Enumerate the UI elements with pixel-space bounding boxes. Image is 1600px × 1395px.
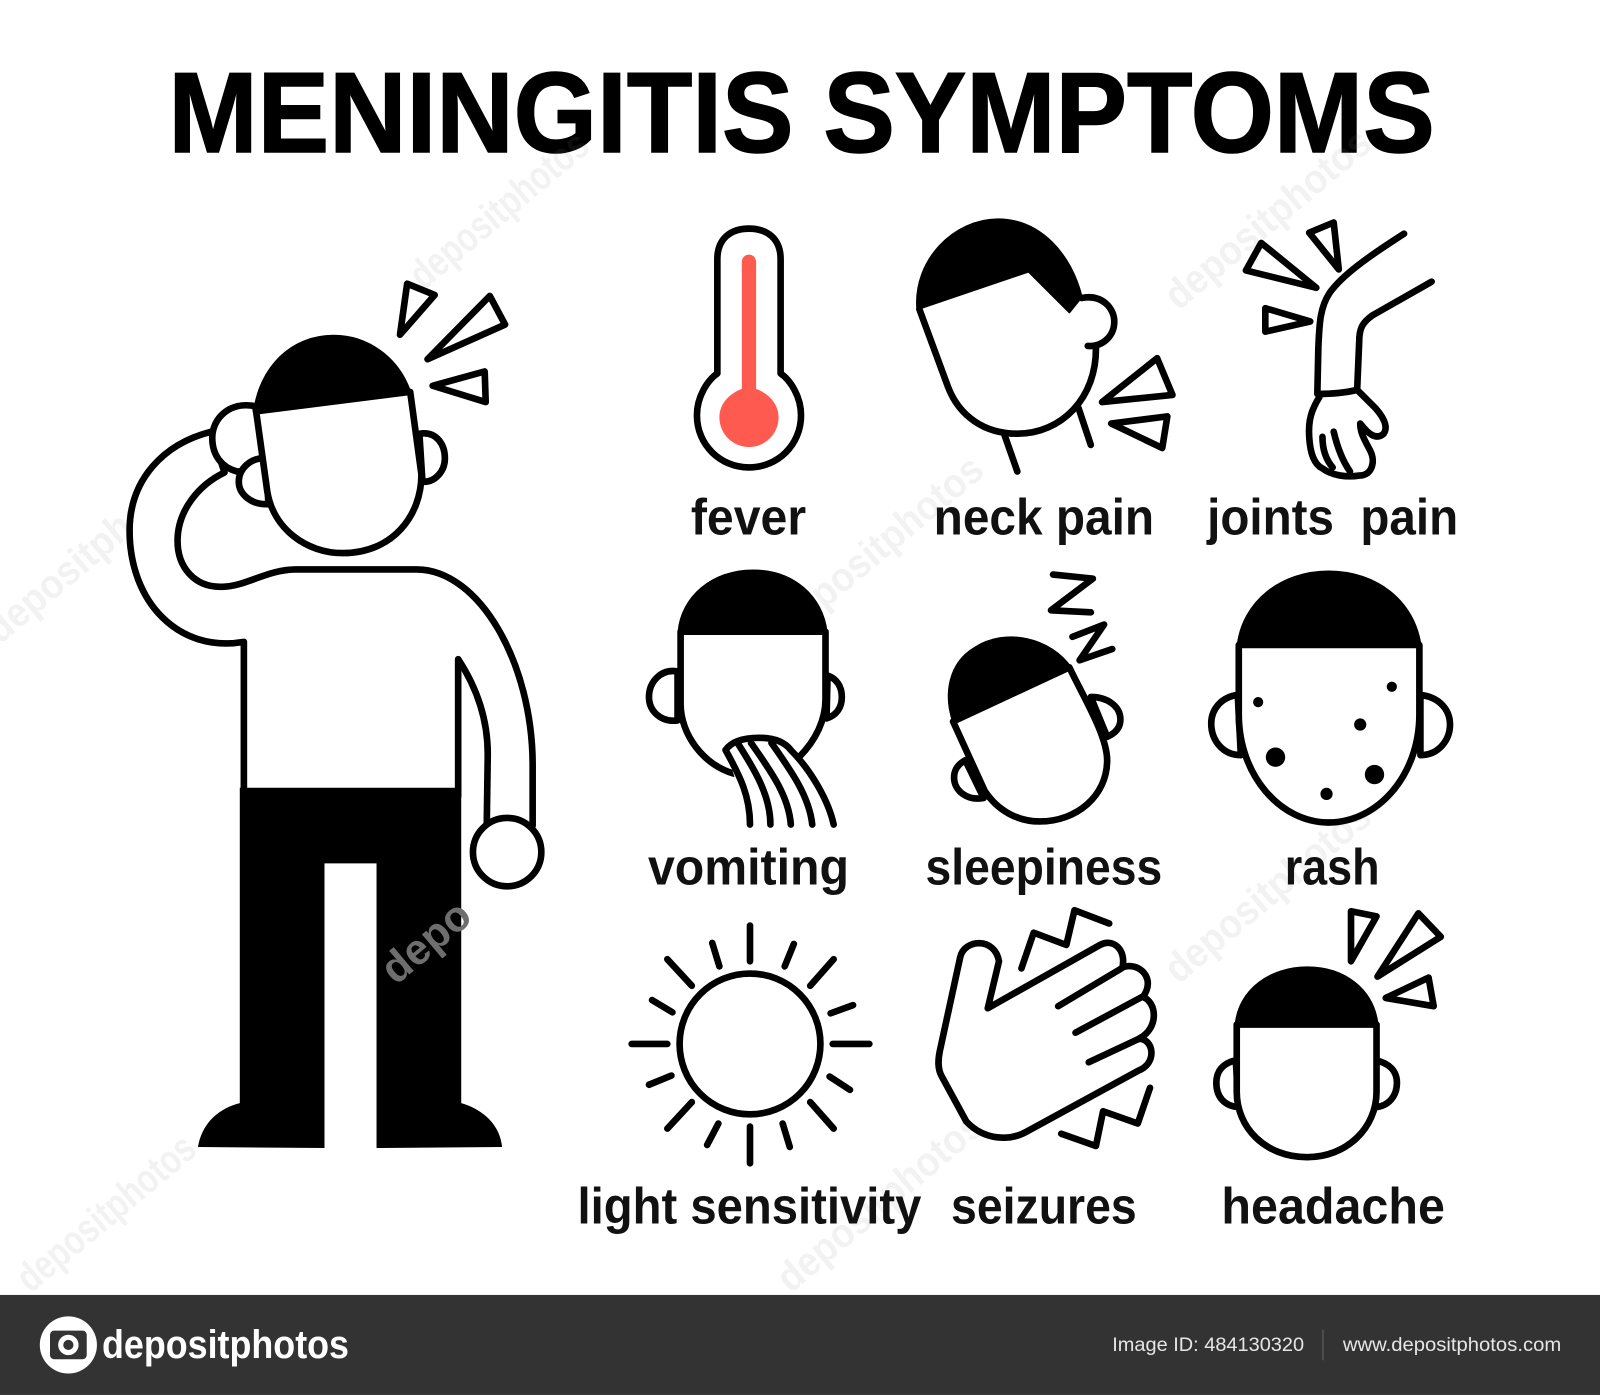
watermark text: depositphotos xyxy=(767,445,992,645)
figure hand at side xyxy=(473,818,541,886)
figure ear left xyxy=(239,458,268,504)
label: joints pain: joints pain xyxy=(1206,489,1458,546)
icon: head vomiting xyxy=(649,570,842,827)
panel: sleepiness xyxy=(926,575,1162,896)
label: headache: headache xyxy=(1221,1178,1445,1235)
label: neck pain: neck pain xyxy=(934,489,1154,546)
figure ear right xyxy=(419,433,445,482)
label: sleepiness: sleepiness xyxy=(926,839,1162,896)
icon: arm with joint pain xyxy=(1246,222,1432,476)
icon: head with neck pain xyxy=(917,219,1172,471)
icon: thermometer xyxy=(697,229,801,467)
label: seizures: seizures xyxy=(951,1178,1137,1235)
figure trousers xyxy=(198,788,502,1148)
footer image id: Image ID: 484130320 xyxy=(1112,1334,1304,1356)
footer logo wordmark: depositphotos xyxy=(102,1323,349,1367)
label: fever: fever xyxy=(691,489,806,546)
icon: sun xyxy=(632,926,869,1163)
label: light sensitivity: light sensitivity xyxy=(578,1178,922,1235)
panel: joints pain xyxy=(1206,222,1458,546)
panel: fever xyxy=(691,229,806,546)
icon: sleeping head xyxy=(949,575,1120,821)
panel: vomiting xyxy=(648,570,849,896)
label: vomiting: vomiting xyxy=(648,839,849,896)
label: rash: rash xyxy=(1285,839,1380,896)
panel: headache xyxy=(1216,911,1445,1235)
icon: head with rash xyxy=(1211,571,1450,822)
panel: neck pain xyxy=(917,219,1172,546)
icon: shaking hand xyxy=(938,910,1154,1146)
figure torso and arms xyxy=(130,432,533,826)
watermark on trousers: depo xyxy=(371,891,481,993)
pain marks at head xyxy=(400,284,505,402)
panel: rash xyxy=(1211,571,1450,896)
figure: man holding his head xyxy=(130,284,541,1148)
watermark text xyxy=(0,119,1380,1301)
panel: seizures xyxy=(938,910,1154,1235)
title: MENINGITIS SYMPTOMS xyxy=(168,50,1435,177)
watermark text: depositphotos xyxy=(7,1125,204,1301)
footer website: www.depositphotos.com xyxy=(1342,1334,1561,1356)
watermark text: depositphotos xyxy=(1155,792,1380,992)
footer logo: camera icon xyxy=(40,1316,97,1374)
footer bar xyxy=(0,1295,1600,1395)
watermark text: depositphotos xyxy=(400,122,597,298)
figure hair xyxy=(254,336,410,411)
watermark text: depositphotos xyxy=(1155,119,1380,318)
watermark text: depositphotos xyxy=(767,1102,992,1301)
panel: light sensitivity xyxy=(578,926,922,1235)
figure head xyxy=(256,392,421,553)
figure hand on head xyxy=(212,405,267,471)
icon: head with headache xyxy=(1216,911,1441,1157)
